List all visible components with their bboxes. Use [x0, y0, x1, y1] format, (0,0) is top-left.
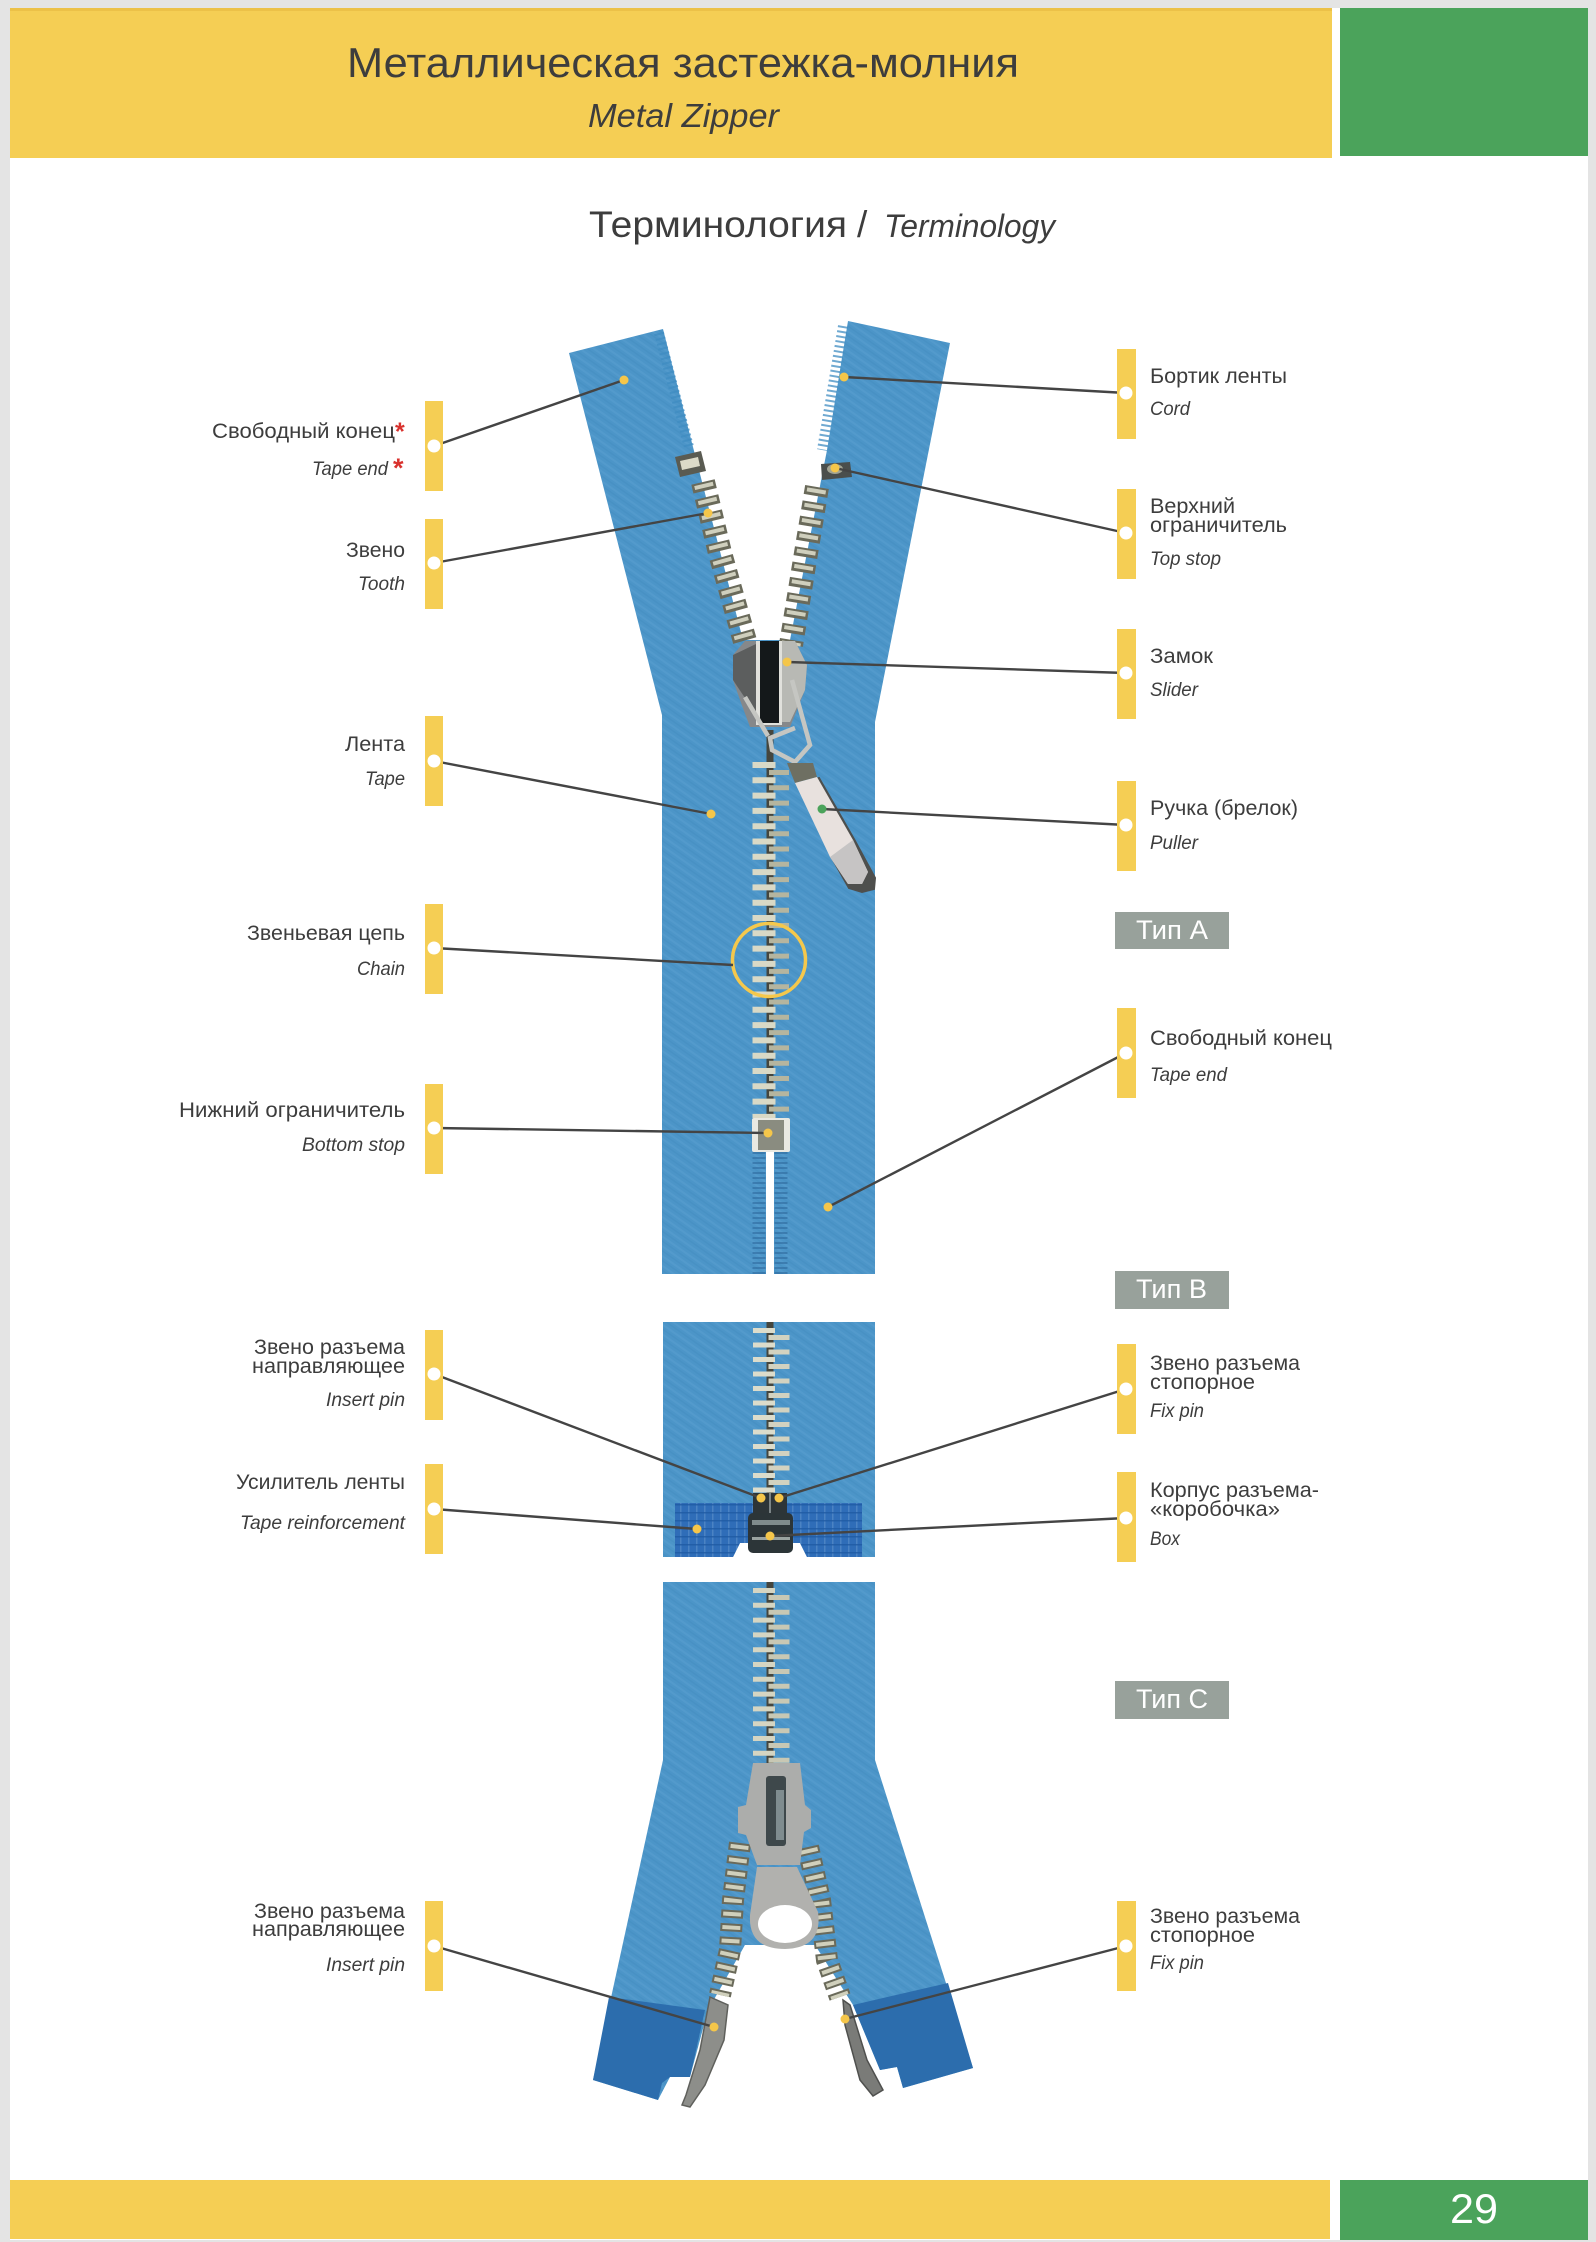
label: top stop: ограничитель: [1150, 514, 1287, 537]
label: insert pin type B: [252, 1330, 443, 1420]
slider pull ring: [750, 1867, 819, 1949]
tape: [663, 1322, 875, 1557]
label: tape end: *: [395, 418, 405, 446]
label: tape end right: [1117, 1008, 1332, 1098]
right teeth on open section: [791, 487, 817, 645]
label: box: [1117, 1472, 1319, 1562]
label: slider: Slider: [1150, 680, 1199, 701]
label: fix pin type C: Звено разъема: [1150, 1905, 1300, 1928]
label: puller: Puller: [1150, 833, 1199, 854]
label: cord: Бортик ленты: [1150, 365, 1287, 388]
chain: [764, 1322, 779, 1495]
label: insert pin type C: Звено разъема: [254, 1900, 405, 1923]
left teeth on open section: [703, 482, 746, 645]
right fix pin: [843, 2000, 883, 2096]
chain highlight circle: [732, 924, 806, 996]
label: insert pin type B: Звено разъема: [254, 1336, 405, 1359]
open chain right: [808, 1847, 840, 1997]
leader: tape end top-left: [434, 376, 628, 446]
tape: [569, 321, 950, 1274]
leader: tooth: [434, 508, 712, 563]
label: insert pin type C: [252, 1900, 443, 1991]
lower open-end stripes: [759, 1152, 781, 1274]
section heading: /: [857, 204, 868, 245]
zipper type B: [663, 1322, 875, 1557]
label: tape: Tape: [365, 769, 405, 790]
badge: type A: Тип А: [1136, 915, 1208, 945]
label: box: Корпус разъема-: [1150, 1479, 1319, 1502]
left reinforcement: [593, 1997, 705, 2100]
insert and fix pins: [753, 1493, 787, 1517]
label: box: Box: [1150, 1529, 1181, 1550]
leader: tape reinforcement: [434, 1509, 702, 1534]
label: puller: Ручка (брелок): [1150, 797, 1298, 820]
label: bottom stop: Bottom stop: [302, 1135, 405, 1156]
label: tape end right: Tape end: [1150, 1065, 1228, 1086]
zipper type C: [593, 1582, 973, 2110]
badge: type A: [1115, 912, 1229, 949]
slider: [733, 641, 807, 727]
label: chain: [247, 904, 443, 994]
label: insert pin type C: направляющее: [252, 1918, 405, 1941]
subtitle: Metal Zipper: [588, 97, 781, 134]
bottom stop: [752, 1118, 790, 1152]
tape cords: [659, 326, 843, 450]
title: Металлическая застежка-молния: [347, 39, 1019, 86]
label: tape: Лента: [345, 733, 405, 756]
top stops: [675, 451, 852, 480]
slider: [738, 1763, 811, 1865]
label: top stop: Верхний: [1150, 495, 1235, 518]
label: tooth: Tooth: [358, 574, 405, 595]
open chain left: [720, 1843, 740, 1995]
section heading: Terminology: [884, 208, 1057, 244]
label: fix pin type C: Fix pin: [1150, 1953, 1204, 1974]
puller: [745, 680, 875, 892]
label: fix pin type C: стопорное: [1150, 1924, 1255, 1947]
label: bottom stop: Нижний ограничитель: [179, 1099, 405, 1122]
label: fix pin type B: Fix pin: [1150, 1401, 1204, 1422]
label: chain: Chain: [357, 959, 405, 980]
section heading: [589, 204, 1057, 245]
leader: insert pin type C: [434, 1946, 718, 2032]
leader: tape: [434, 761, 716, 818]
leader: bottom stop: [434, 1128, 772, 1138]
label: tape reinforcement: Усилитель ленты: [236, 1471, 405, 1494]
closed chain: [764, 1582, 779, 1770]
label: insert pin type C: Insert pin: [326, 1955, 405, 1976]
label: chain: Звеньевая цепь: [247, 922, 405, 945]
label: top stop: [1117, 489, 1287, 579]
footer page number block: [1340, 2180, 1588, 2240]
badge: type B: Тип В: [1136, 1274, 1207, 1304]
badge: type B: [1115, 1271, 1229, 1309]
label: tape: [345, 716, 443, 806]
label: insert pin type B: Insert pin: [326, 1390, 405, 1411]
label: fix pin type B: [1117, 1344, 1300, 1434]
leader: puller: [818, 804, 1126, 825]
label: fix pin type B: стопорное: [1150, 1371, 1255, 1394]
leader: cord: [840, 372, 1126, 393]
zipper type A: [569, 321, 950, 1274]
label: cord: Cord: [1150, 399, 1191, 420]
left insert pin: [682, 1997, 728, 2107]
label: bottom stop: [179, 1084, 443, 1174]
label: cord: [1117, 349, 1287, 439]
header band: [10, 8, 1332, 158]
label: tape reinforcement: [236, 1464, 443, 1554]
label: tape end right: Свободный конец: [1150, 1027, 1332, 1050]
footer yellow band: [10, 2180, 1330, 2239]
box: [748, 1513, 793, 1553]
label: slider: Замок: [1150, 645, 1214, 668]
label: slider: [1117, 629, 1214, 719]
label: tape end: [212, 401, 443, 491]
label: fix pin type B: Звено разъема: [1150, 1352, 1300, 1375]
badge: type C: Тип С: [1136, 1684, 1208, 1714]
leader: fix pin type B: [774, 1389, 1126, 1502]
leader: insert pin type B: [434, 1374, 766, 1502]
label: box: «коробочка»: [1150, 1498, 1280, 1521]
label: insert pin type B: направляющее: [252, 1355, 405, 1378]
label: tape end: Свободный конец: [212, 420, 395, 443]
header green block: [1340, 8, 1588, 156]
section heading: Терминология: [589, 204, 847, 245]
tape: [593, 1582, 973, 2100]
leader: chain: [434, 948, 733, 965]
label: fix pin type C: [1117, 1901, 1300, 1991]
closed chain: [764, 730, 779, 1118]
label: tape end: *: [393, 453, 404, 483]
leader: fix pin type C: [840, 1946, 1126, 2024]
leader: box: [766, 1518, 1126, 1540]
label: tooth: [346, 519, 443, 609]
label: top stop: Top stop: [1150, 549, 1221, 570]
leader: tape end right: [824, 1053, 1126, 1212]
label: tape reinforcement: Tape reinforcement: [240, 1513, 406, 1534]
leader: slider: [782, 658, 1126, 673]
leader: top stop: [830, 464, 1126, 533]
white opening: [690, 1945, 883, 2110]
tape reinforcement: [675, 1503, 862, 1557]
label: tape end: Tape end: [312, 459, 389, 480]
right reinforcement: [853, 1983, 973, 2088]
badge: type C: [1115, 1681, 1229, 1719]
label: tooth: Звено: [346, 539, 405, 562]
label: puller: [1117, 781, 1298, 871]
footer page number block: 29: [1450, 2185, 1498, 2232]
